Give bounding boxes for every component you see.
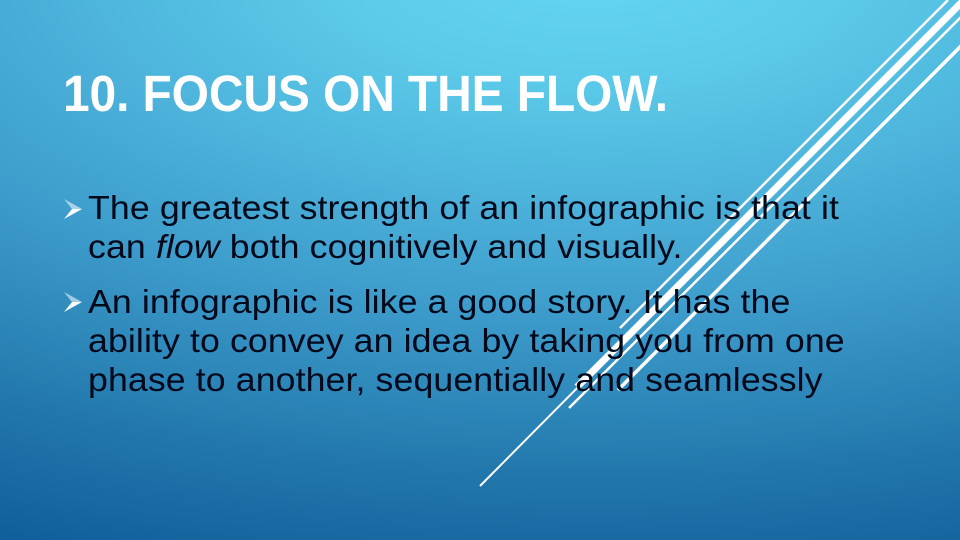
bullet 1: can flow both cognitively and visually.	[88, 228, 682, 265]
icon: arrow bullet 1	[64, 199, 82, 219]
bullet 2	[64, 283, 845, 398]
bullet 2: phase to another, sequentially and seamlessly	[88, 361, 823, 398]
bullet 1: The greatest strength of an infographic is that it	[88, 189, 839, 226]
bullet 1	[64, 189, 839, 265]
bullet 2: ability to convey an idea by taking you from one	[88, 322, 845, 359]
title: 10. FOCUS ON THE FLOW.	[63, 66, 668, 123]
icon: arrow bullet 2	[64, 292, 82, 312]
bullet 2: An infographic is like a good story. It has the	[88, 283, 790, 320]
